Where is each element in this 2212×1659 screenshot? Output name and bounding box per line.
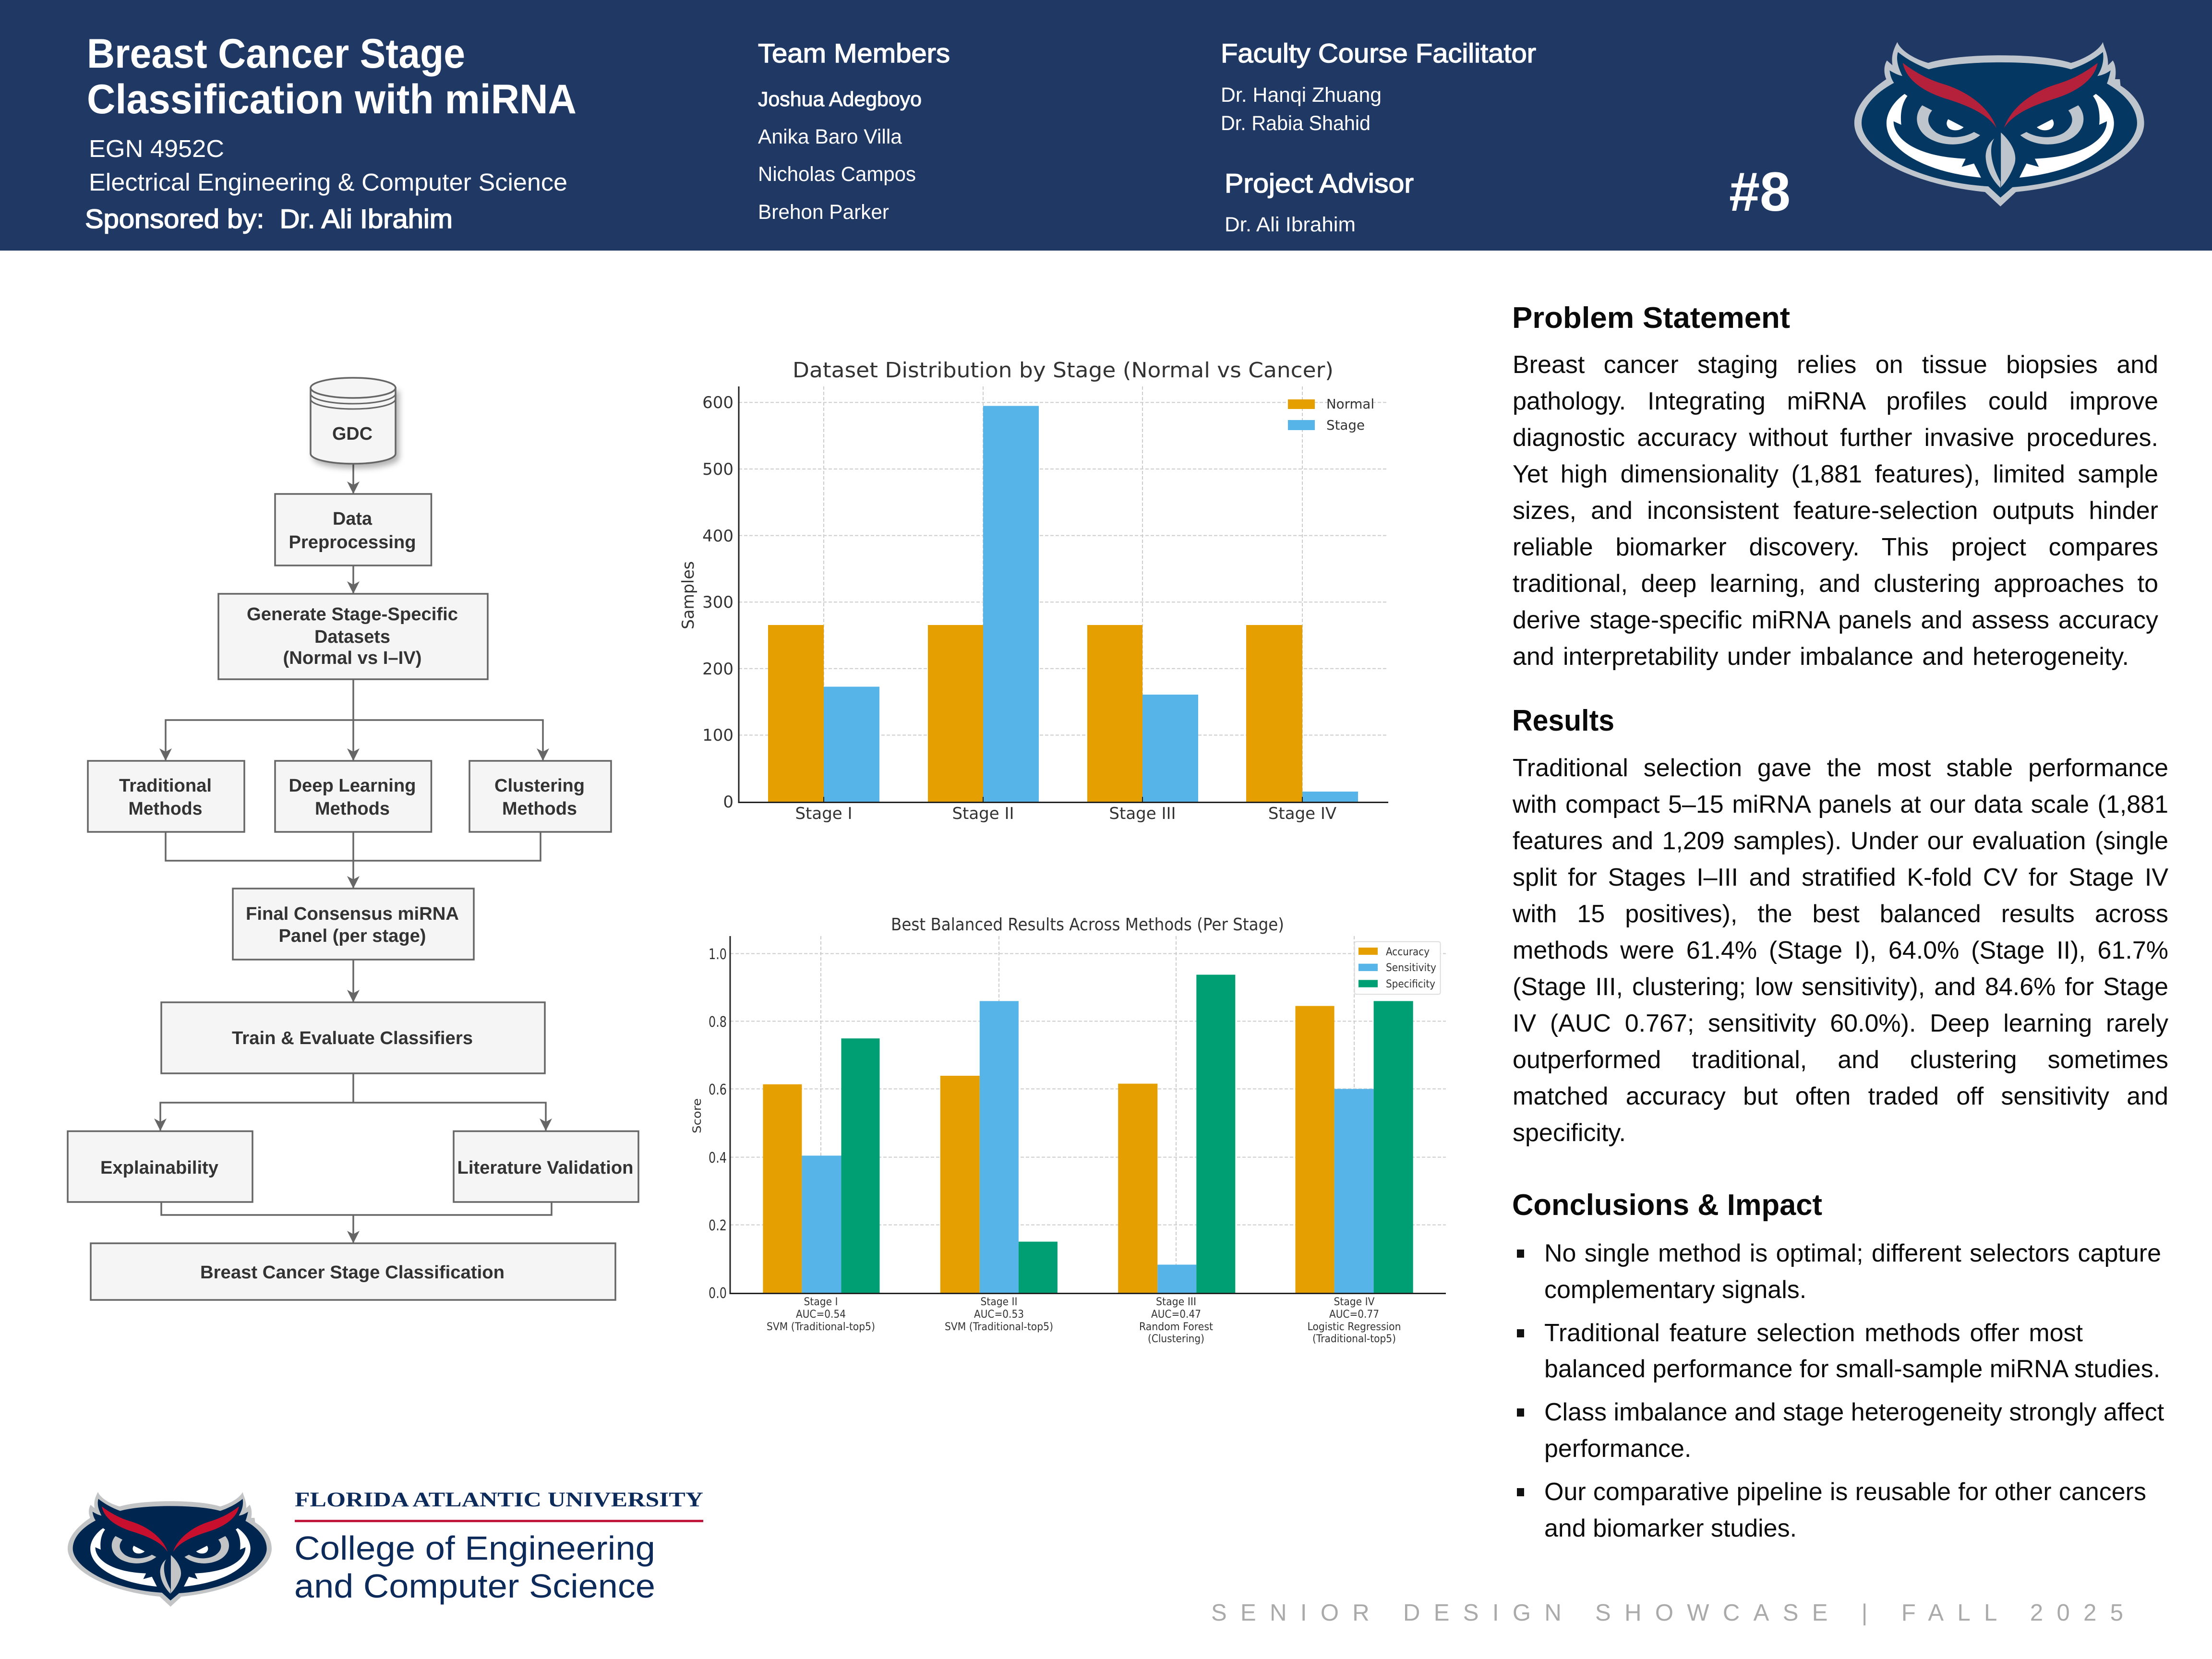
node: final consensus panel: Final Consensus miRNA [246,904,459,924]
node: data preprocessing: Data [333,509,373,529]
legend [1355,942,1441,994]
normal bars [768,625,1302,802]
bullet list: conclusions: Traditional feature selection methods offer most [1544,1319,2083,1347]
bullet list: conclusions: performance. [1544,1435,1691,1463]
node: literature validation [454,1131,638,1202]
x axis labels: (Traditional-top5) [1312,1333,1396,1345]
project advisor: Dr. Ali Ibrahim [1225,213,1356,236]
sensitivity bars [802,1001,1374,1293]
node: clustering methods [469,761,611,832]
text block: problem statement: traditional, deep learning, and clustering approaches to [1513,570,2158,598]
node: data preprocessing [275,494,431,565]
y axis title: Samples [679,561,698,629]
y axis ticks: 0.6 [709,1082,727,1098]
text block: problem statement: Yet high dimensionality (1,881 features), limited sample [1513,460,2158,488]
x axis labels: (Clustering) [1148,1333,1204,1345]
node: train and evaluate [161,1002,545,1073]
text block: problem statement: diagnostic accuracy without further invasive procedures. [1513,424,2158,452]
x axis labels: Stage IV [1334,1296,1375,1308]
bullet list: conclusions: No single method is optimal; different selectors capture [1544,1239,2161,1267]
text block: problem statement: pathology. Integrating miRNA profiles could improve [1513,387,2158,415]
node: final consensus panel: Panel (per stage) [278,926,426,946]
y axis ticks [702,393,733,812]
faculty course facilitator: Dr. Hanqi Zhuang [1221,84,1382,107]
y axis ticks: 600 [702,393,733,412]
text block: results: outperformed traditional, and clustering sometimes [1513,1046,2168,1074]
college wordmark: College of Engineering [294,1529,655,1567]
x axis labels [767,1296,1401,1345]
y axis ticks [709,946,727,1302]
node: data preprocessing: Preprocessing [289,532,416,553]
y axis ticks: 100 [702,726,733,745]
team members: Nicholas Campos [758,163,916,186]
node: traditional methods: Traditional [119,776,212,796]
node: train and evaluate: Train & Evaluate Classifiers [232,1028,473,1048]
node: deep learning methods: Methods [315,799,390,819]
node: explainability: Explainability [100,1158,218,1178]
x axis labels: Stage I [795,804,853,823]
project title: Breast Cancer Stage [87,31,465,77]
node: deep learning methods [275,761,431,832]
node: clustering methods: Methods [502,799,577,819]
x axis labels: Stage IV [1268,804,1336,823]
text block: problem statement: sizes, and inconsistent feature-selection outputs hinder [1513,497,2158,525]
node: stage-specific datasets [218,594,488,679]
y axis ticks: 500 [702,460,733,479]
project title [87,31,577,122]
bar chart: best balanced results [690,915,1446,1345]
text block: results: features and 1,209 samples). Under our evaluation (single [1513,827,2168,855]
node: stage-specific datasets: (Normal vs I–IV) [283,648,421,668]
faculty course facilitator [1221,38,1536,135]
legend: Stage [1326,417,1365,433]
text block: results: IV (AUC 0.767; sensitivity 60.0%). Deep learning rarely [1513,1010,2168,1037]
y axis ticks: 400 [702,527,733,546]
x axis labels: AUC=0.53 [974,1309,1024,1321]
y axis ticks: 200 [702,660,733,679]
sponsor line: Sponsored by: Dr. Ali Ibrahim [85,204,453,234]
node: deep learning methods: Deep Learning [289,776,416,796]
text block: results [1512,754,2168,1147]
faculty course facilitator: Faculty Course Facilitator [1221,38,1536,68]
node: GDC database [311,378,396,464]
legend: Accuracy [1386,946,1430,958]
course and department: Electrical Engineering & Computer Science [89,168,567,196]
x axis labels: AUC=0.54 [796,1309,846,1321]
node: clustering methods: Clustering [494,776,585,796]
y axis ticks: 0.2 [709,1217,727,1234]
accuracy bars [763,1006,1334,1293]
bullet list: conclusions: complementary signals. [1544,1276,1806,1304]
text block: results: split for Stages I–III and stratified K-fold CV for Stage IV [1513,864,2168,891]
x axis labels: Stage I [804,1296,838,1308]
heading: conclusions and impact: Conclusions & Impact [1512,1189,1822,1222]
legend: Sensitivity [1386,962,1436,974]
node: traditional methods [88,761,244,832]
college wordmark [294,1489,703,1605]
college wordmark: and Computer Science [294,1567,655,1605]
x axis labels: AUC=0.47 [1151,1309,1201,1321]
y axis title: Score [690,1098,704,1133]
x axis labels: Stage III [1156,1296,1196,1308]
legend: Normal [1326,396,1374,412]
chart title: Dataset Distribution by Stage (Normal vs Cancer) [793,358,1334,383]
team members: Joshua Adegboyo [758,88,922,111]
legend: Specificity [1386,978,1435,990]
project number: #8 [1729,161,1791,223]
y axis ticks: 300 [702,593,733,612]
x axis labels: Logistic Regression [1308,1321,1401,1333]
text block: results: methods were 61.4% (Stage I), 64.0% (Stage II), 61.7% [1513,937,2168,964]
text block: problem statement: reliable biomarker discovery. This project compares [1513,533,2158,561]
team members [758,38,950,224]
bullet list: conclusions: Our comparative pipeline is reusable for other cancers [1544,1478,2146,1506]
node: final classification: Breast Cancer Stage Classification [200,1262,505,1283]
text block: results: with compact 5–15 miRNA panels at our data scale (1,881 [1513,791,2168,818]
node: traditional methods: Methods [129,799,203,819]
text block: results: (Stage III, clustering; low sensitivity), and 84.6% for Stage [1513,973,2168,1001]
node: GDC database: GDC [332,424,373,444]
y axis ticks: 0.8 [709,1014,727,1031]
course and department: EGN 4952C [89,135,224,162]
node: literature validation: Literature Validation [457,1158,634,1178]
bullet list: conclusions: and biomarker studies. [1544,1515,1797,1542]
team members: Team Members [758,38,950,68]
heading: results: Results [1512,704,1614,737]
project advisor: Project Advisor [1225,168,1414,198]
course and department [89,135,567,196]
y axis ticks: 0.4 [709,1150,727,1166]
x axis labels: SVM (Traditional-top5) [945,1321,1053,1333]
node: final consensus panel [233,889,474,960]
college wordmark: FLORIDA ATLANTIC UNIVERSITY [295,1489,703,1511]
chart title: Best Balanced Results Across Methods (Per Stage) [891,915,1284,935]
x axis labels: SVM (Traditional-top5) [767,1321,875,1333]
x axis labels: AUC=0.77 [1329,1309,1379,1321]
icon: FAU owl logo in header [1854,42,2144,206]
project advisor [1225,168,1414,236]
flowchart: methodology pipeline [68,378,638,1300]
text block: results: Traditional selection gave the most stable performance [1513,754,2168,782]
y axis ticks: 1.0 [709,946,727,963]
specificity bars [841,974,1413,1293]
x axis labels: Random Forest [1139,1321,1213,1333]
y axis ticks: 0.0 [709,1285,727,1302]
footer tagline: SENIOR DESIGN SHOWCASE | FALL 2025 [1211,1600,2123,1626]
node: explainability [68,1131,252,1202]
text block: problem statement: derive stage-specific miRNA panels and assess accuracy [1513,606,2158,634]
node: stage-specific datasets: Datasets [314,627,390,647]
heading: problem statement: Problem Statement [1512,301,1790,335]
project title: Classification with miRNA [87,76,577,122]
bullet list: conclusions: balanced performance for small-sample miRNA studies. [1544,1355,2160,1383]
text block: problem statement [1513,351,2158,671]
node: final classification [91,1243,615,1300]
text block: problem statement: Breast cancer staging relies on tissue biopsies and [1513,351,2158,379]
text block: results: matched accuracy but often traded off sensitivity and [1513,1082,2168,1110]
x axis labels [795,804,1336,823]
flow connectors [160,464,552,1243]
bullet list: conclusions: Class imbalance and stage heterogeneity strongly affect [1544,1398,2164,1426]
icon: FAU owl logo bottom [68,1492,272,1607]
team members: Brehon Parker [758,201,889,224]
x axis labels: Stage II [952,804,1014,823]
legend [1288,396,1374,433]
text block: problem statement: and interpretability under imbalance and heterogeneity. [1513,643,2129,671]
node: stage-specific datasets: Generate Stage-Specific [247,604,458,625]
team members: Anika Baro Villa [758,125,902,148]
x axis labels: Stage III [1109,804,1176,823]
bar chart: dataset distribution [679,358,1388,823]
stage bars [824,406,1358,802]
text block: results: with 15 positives), the best balanced results across [1513,900,2168,928]
y axis ticks: 0 [723,793,733,812]
x axis labels: Stage II [980,1296,1018,1308]
text block: results: specificity. [1513,1119,1626,1147]
header banner [0,0,2212,251]
bullet list: conclusions [1517,1239,2164,1542]
faculty course facilitator: Dr. Rabia Shahid [1221,112,1370,135]
